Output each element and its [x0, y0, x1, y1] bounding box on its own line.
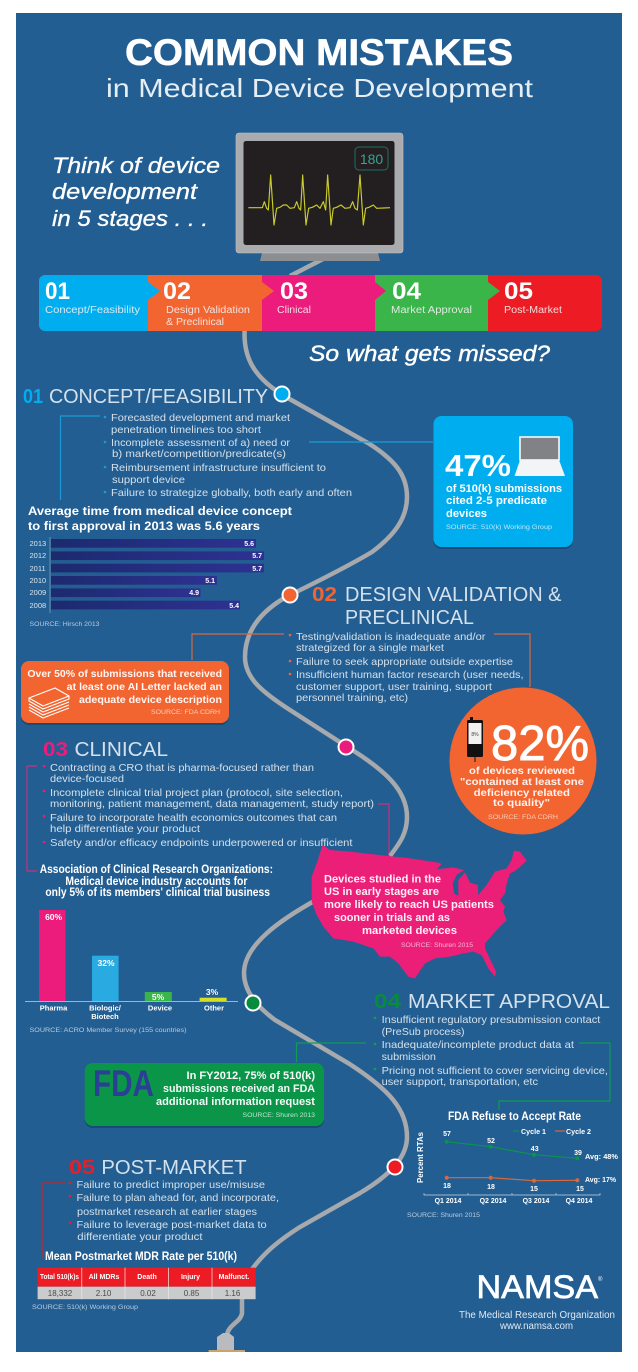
- line chart: FDA refuse to accept rate: FDA Refuse to Accept Rate: [448, 1111, 581, 1123]
- panel: 04 market approval: Pricing not sufficient to cover servicing device,: [382, 1065, 608, 1077]
- line chart: FDA refuse to accept rate: Cycle 1: [521, 1129, 546, 1136]
- stage node markers: [246, 386, 402, 1174]
- panel: 01 concept/feasibility: Incomplete assessment of a) need or: [111, 437, 291, 449]
- panel: 02 design validation: personnel training, etc): [296, 692, 408, 704]
- stage bar: 02: [163, 278, 191, 305]
- callout: 82 percent circle: of devices reviewed: [469, 765, 575, 777]
- panel: 05 post-market: Failure to leverage post-market data to: [76, 1219, 267, 1231]
- line chart: FDA refuse to accept rate: Q2 2014: [480, 1198, 507, 1205]
- icon: power plug: [209, 1333, 245, 1352]
- panel: 01 concept/feasibility: penetration timelines too short: [111, 424, 261, 436]
- icon: phone device: 8%: [471, 732, 479, 738]
- panel: 01 concept/feasibility: [23, 386, 433, 500]
- bar chart: ACRO business share: Other: [204, 1004, 224, 1013]
- bar chart: ACRO business share: SOURCE: ACRO Member Survey (155 countries): [30, 1027, 186, 1034]
- stage bar: Post-Market: [504, 305, 562, 316]
- logo: NAMSA: ®: [598, 1276, 603, 1283]
- bar chart: time to first approval: 5.4: [229, 603, 239, 610]
- panel: 05 post-market: Failure to plan ahead for, and incorporate,: [76, 1192, 279, 1204]
- table: mean postmarket MDR rate: [32, 1251, 256, 1311]
- table: mean postmarket MDR rate: Mean Postmarket MDR Rate per 510(k): [45, 1251, 237, 1263]
- bar chart: ACRO business share: Device: [148, 1004, 172, 1013]
- callout: 47 percent: cited 2-5 predicate: [446, 495, 547, 507]
- bar chart: ACRO business share: 60%: [45, 912, 63, 922]
- panel: 01 concept/feasibility: Reimbursement infrastructure insufficient to: [111, 462, 326, 474]
- logo: NAMSA: NAMSA: [476, 1269, 599, 1305]
- line chart: FDA refuse to accept rate: Q3 2014: [523, 1198, 550, 1205]
- callout: 47 percent: of 510(k) submissions: [446, 483, 562, 495]
- panel: 03 clinical: CLINICAL: [74, 739, 168, 761]
- table: mean postmarket MDR rate: 1.16: [225, 1289, 241, 1298]
- stage bar: 05: [504, 278, 533, 305]
- icon: laptop: [514, 437, 565, 476]
- line chart: FDA refuse to accept rate: 39: [574, 1150, 582, 1157]
- bar chart: time to first approval: 2010: [30, 576, 46, 585]
- line chart: FDA refuse to accept rate: Avg: 17%: [585, 1177, 617, 1184]
- logo: NAMSA: www.namsa.com: [499, 1321, 573, 1332]
- line chart: FDA refuse to accept rate: 15: [576, 1186, 584, 1193]
- line chart: FDA refuse to accept rate: 18: [487, 1184, 495, 1191]
- stage bar: & Preclinical: [166, 317, 224, 328]
- callout: FDA request: SOURCE: Shuren 2013: [242, 1112, 315, 1119]
- bar chart: time to first approval: to first approval in 2013 was 5.6 years: [28, 521, 260, 533]
- table: mean postmarket MDR rate: Total 510(k)s: [40, 1274, 79, 1281]
- line chart: FDA refuse to accept rate: Q1 2014: [435, 1198, 462, 1205]
- panel: 02 design validation: 02: [312, 584, 337, 606]
- panel: 02 design validation: DESIGN VALIDATION &: [345, 584, 562, 606]
- bar chart: ACRO business share: Biotech: [91, 1012, 119, 1021]
- panel: 05 post-market: postmarket research at earlier stages: [77, 1206, 257, 1218]
- stage bar: [39, 275, 602, 331]
- intro text: [52, 153, 220, 231]
- bar chart: ACRO business share: Biologic/: [89, 1004, 122, 1013]
- map: United States: [312, 845, 527, 978]
- panel: 05 post-market: [43, 1157, 279, 1257]
- panel: 03 clinical: 03: [43, 739, 68, 761]
- map: United States: more likely to reach US patients: [324, 899, 494, 911]
- panel: 01 concept/feasibility: Failure to strategize globally, both early and often: [111, 487, 352, 499]
- line chart: FDA refuse to accept rate: 18: [443, 1183, 451, 1190]
- callout: 82 percent circle: SOURCE: FDA CDRH: [488, 814, 558, 821]
- bar chart: time to first approval: Average time from medical device concept: [28, 506, 292, 518]
- panel: 04 market approval: (PreSub process): [382, 1026, 465, 1038]
- bar chart: ACRO business share: Pharma: [40, 1004, 68, 1013]
- line chart: FDA refuse to accept rate: SOURCE: Shuren 2015: [407, 1212, 480, 1219]
- bar chart: time to first approval: 2008: [30, 601, 46, 610]
- bar chart: ACRO business share: 3%: [206, 987, 219, 997]
- bar chart: ACRO business share: 32%: [97, 958, 115, 968]
- question heading: So what gets missed?: [309, 341, 551, 366]
- title: COMMON MISTAKES: [125, 32, 513, 73]
- bar chart: time to first approval: 2011: [30, 564, 46, 573]
- map: United States: Devices studied in the: [324, 874, 441, 886]
- callout: 47 percent: 47%: [445, 448, 511, 483]
- bar chart: ACRO business share: 5%: [152, 992, 165, 1002]
- table: mean postmarket MDR rate: Injury: [181, 1274, 200, 1281]
- panel: 03 clinical: Failure to incorporate health economics outcomes that can: [50, 812, 337, 824]
- line chart: FDA refuse to accept rate: Q4 2014: [566, 1198, 593, 1205]
- panel: 03 clinical: monitoring, patient management, data management, study report): [50, 798, 374, 810]
- bar chart: time to first approval: 2013: [30, 539, 46, 548]
- line chart: FDA refuse to accept rate: 52: [487, 1138, 495, 1145]
- intro text: Think of device: [52, 153, 220, 178]
- bar chart: time to first approval: 2012: [30, 551, 46, 560]
- callout: AI letter: at least one AI Letter lacked an: [67, 681, 222, 693]
- icon: paper stack: [29, 688, 69, 718]
- title: in Medical Device Development: [106, 73, 534, 103]
- logo: NAMSA: [459, 1269, 615, 1332]
- stage bar: Concept/Feasibility: [45, 305, 140, 316]
- intro text: in 5 stages . . .: [52, 206, 208, 231]
- panel: 03 clinical: Incomplete clinical trial project plan (protocol, site selection,: [50, 787, 343, 799]
- panel: 04 market approval: user support, transportation, etc: [382, 1076, 538, 1088]
- table: mean postmarket MDR rate: All MDRs: [89, 1274, 119, 1281]
- stage bar: Clinical: [277, 305, 311, 316]
- callout: 47 percent: devices: [446, 508, 487, 520]
- intro text: development: [52, 179, 198, 204]
- ribbon: monitor cable running through the stages: [227, 258, 407, 1335]
- line chart: FDA refuse to accept rate: Avg: 48%: [585, 1154, 619, 1161]
- callout: 47 percent: [434, 416, 573, 549]
- panel: 04 market approval: submission: [382, 1051, 436, 1063]
- icon: phone device: [467, 717, 483, 762]
- callout: 47 percent: SOURCE: 510(k) Working Group: [446, 524, 552, 531]
- bar chart: ACRO business share: only 5% of its members' clinical trial business: [45, 887, 270, 899]
- panel: 02 design validation: Failure to seek appropriate outside expertise: [296, 656, 513, 668]
- table: mean postmarket MDR rate: Death: [137, 1274, 157, 1281]
- map: United States: SOURCE: Shuren 2015: [401, 942, 473, 949]
- icon: heart monitor: 180: [360, 151, 383, 167]
- panel: 01 concept/feasibility: CONCEPT/FEASIBILITY: [49, 386, 268, 408]
- callout: AI letter: SOURCE: FDA CDRH: [151, 709, 220, 716]
- title: [106, 32, 534, 103]
- bar chart: ACRO business share: [25, 864, 273, 1034]
- bar chart: time to first approval: [28, 506, 292, 628]
- bar chart: time to first approval: 2009: [30, 588, 46, 597]
- panel: 04 market approval: Insufficient regulatory presubmission contact: [382, 1014, 600, 1026]
- panel: 04 market approval: [296, 991, 610, 1110]
- panel: 01 concept/feasibility: b) market/competition/predicate(s): [112, 448, 286, 460]
- bar chart: ACRO business share: Association of Clinical Research Organizations:: [40, 864, 273, 876]
- table: mean postmarket MDR rate: Malfunct.: [219, 1274, 249, 1281]
- bar chart: time to first approval: 5.7: [252, 553, 262, 560]
- panel: 03 clinical: device-focused: [50, 773, 124, 785]
- stage bar: 01: [45, 278, 70, 305]
- callout: AI letter: [21, 661, 229, 725]
- bar chart: time to first approval: SOURCE: Hirsch 2013: [30, 621, 100, 628]
- map: United States: marketed devices: [362, 925, 457, 937]
- table: mean postmarket MDR rate: 18,332: [48, 1289, 73, 1298]
- icon: FDA logo: FDA: [93, 1063, 154, 1104]
- line chart: FDA refuse to accept rate: Percent RTAs: [415, 1132, 425, 1183]
- bar chart: time to first approval: 5.1: [205, 578, 215, 585]
- logo: NAMSA: The Medical Research Organization: [459, 1310, 615, 1321]
- panel: 03 clinical: Safety and/or efficacy endpoints underpowered or insufficient: [50, 837, 353, 849]
- callout: FDA request: additional information request: [156, 1096, 315, 1108]
- bar chart: ACRO business share: Medical device industry accounts for: [65, 876, 248, 888]
- line chart: FDA refuse to accept rate: Cycle 2: [566, 1129, 591, 1136]
- callout: AI letter: Over 50% of submissions that received: [27, 668, 222, 680]
- stage bar: Design Validation: [166, 305, 250, 316]
- panel: 01 concept/feasibility: Forecasted development and market: [111, 412, 290, 424]
- panel: 02 design validation: [192, 584, 562, 704]
- line chart: FDA refuse to accept rate: 57: [443, 1131, 451, 1138]
- panel: 03 clinical: [27, 739, 389, 871]
- table: mean postmarket MDR rate: 2.10: [96, 1289, 112, 1298]
- callout: 82 percent circle: [450, 688, 596, 834]
- panel: 03 clinical: Contracting a CRO that is pharma-focused rather than: [50, 762, 314, 774]
- callout: FDA request: submissions received an FDA: [163, 1083, 315, 1095]
- callout: FDA request: In FY2012, 75% of 510(k): [186, 1070, 315, 1082]
- bar chart: time to first approval: 5.7: [252, 566, 262, 573]
- panel: 05 post-market: POST-MARKET: [101, 1157, 247, 1179]
- icon: heart monitor: [236, 133, 403, 261]
- panel: 02 design validation: strategized for a single market: [296, 642, 444, 654]
- panel: 02 design validation: PRECLINICAL: [345, 607, 474, 629]
- map: United States: sooner in trials and as: [334, 912, 450, 924]
- callout: AI letter: adequate device description: [79, 694, 222, 706]
- table: mean postmarket MDR rate: 0.02: [140, 1289, 156, 1298]
- stage bar: 03: [280, 278, 308, 305]
- bar chart: time to first approval: 4.9: [189, 590, 199, 597]
- map: United States: US in early stages are: [324, 886, 439, 898]
- callout: 82 percent circle: deficiency related: [474, 787, 570, 799]
- panel: 02 design validation: Testing/validation is inadequate and/or: [296, 631, 486, 643]
- line chart: FDA refuse to accept rate: 43: [531, 1146, 539, 1153]
- callout: 82 percent circle: to quality": [493, 797, 550, 809]
- panel: 05 post-market: Failure to predict improper use/misuse: [76, 1179, 265, 1191]
- panel: 01 concept/feasibility: support device: [112, 474, 185, 486]
- panel: 05 post-market: differentiate your product: [77, 1231, 203, 1243]
- panel: 04 market approval: Inadequate/incomplete product data at: [382, 1039, 574, 1051]
- panel: 03 clinical: help differentiate your product: [50, 823, 200, 835]
- line chart: FDA refuse to accept rate: 15: [530, 1186, 538, 1193]
- table: mean postmarket MDR rate: 0.85: [184, 1289, 200, 1298]
- panel: 01 concept/feasibility: 01: [23, 386, 43, 408]
- panel: 02 design validation: Insufficient human factor research (user needs,: [296, 669, 524, 681]
- bar chart: time to first approval: 5.6: [244, 541, 254, 548]
- panel: 05 post-market: 05: [69, 1157, 95, 1179]
- panel: 02 design validation: customer support, user training, support: [296, 681, 492, 693]
- callout: 82 percent circle: "contained at least one: [460, 776, 584, 788]
- stage bar: 04: [392, 278, 422, 305]
- stage bar: Market Approval: [391, 305, 472, 316]
- line chart: FDA refuse to accept rate: [407, 1111, 619, 1219]
- callout: FDA request: [85, 1063, 324, 1128]
- panel: 04 market approval: MARKET APPROVAL: [408, 991, 610, 1013]
- callout: 82 percent circle: 82%: [491, 717, 589, 771]
- table: mean postmarket MDR rate: SOURCE: 510(k) Working Group: [32, 1304, 138, 1311]
- panel: 04 market approval: 04: [374, 991, 402, 1013]
